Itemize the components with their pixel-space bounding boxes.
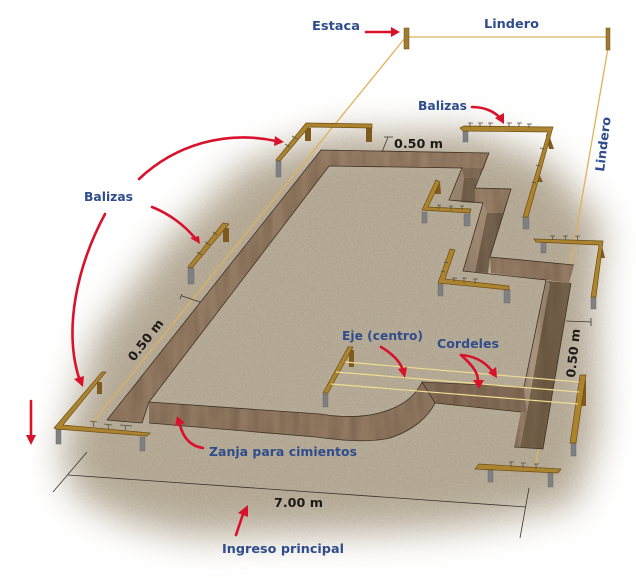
label: Zanja para cimientos: Zanja para cimientos [209, 444, 357, 459]
label: Balizas left: Balizas [84, 189, 133, 204]
trench edge lines [107, 150, 574, 449]
trench wood walls [107, 150, 574, 449]
arrow: Balizas left to bottom board [73, 214, 105, 387]
arrow: Ingreso principal [236, 505, 248, 535]
measure: 7.00 m: 7.00 m [274, 495, 323, 510]
measure: 0.50 m top: 0.50 m [394, 136, 443, 151]
arrow: down [26, 401, 36, 445]
label: Estaca: Estaca [312, 18, 360, 33]
stake batter board: inner notch upper [422, 180, 471, 226]
label: Balizas top: Balizas [418, 98, 467, 113]
stakes (estacas) [404, 28, 610, 50]
arrow: Zanja [175, 416, 203, 448]
label: Cordeles: Cordeles [437, 336, 499, 351]
foundation trench [107, 150, 574, 449]
stake batter board: right [534, 236, 605, 309]
stake batter board: left middle [188, 223, 229, 284]
arrow: Balizas top [472, 107, 504, 124]
stake batter board: top right [460, 123, 554, 229]
stake batter board: top left [276, 123, 372, 177]
arrow: Balizas left to top board [139, 136, 284, 179]
stake batter board: bottom left [54, 372, 150, 451]
label: Ingreso principal: Ingreso principal [222, 541, 344, 556]
label: Lindero top: Lindero [484, 16, 539, 31]
ground terrain [62, 132, 602, 536]
string lines (cordeles) [331, 362, 579, 404]
measure: 0.50 m left: 0.50 m [125, 316, 167, 364]
measure: 0.50 m right: 0.50 m [563, 328, 583, 378]
arrow: Balizas left to middle board [152, 207, 200, 244]
label: Eje (centro): Eje (centro) [342, 328, 423, 343]
dimension ticks: 0.50 m [180, 137, 591, 326]
arrow: Estaca [366, 27, 400, 37]
boundary lines [93, 37, 608, 464]
stake batter board: bottom right [475, 462, 561, 487]
stake batter board: inner notch lower [438, 249, 510, 303]
dimension line: 7.00 m [53, 452, 529, 538]
label: Lindero right: Lindero [592, 116, 614, 172]
arrow: Cordeles [461, 355, 497, 389]
arrow: Eje [381, 347, 407, 378]
stake batter board: lower right [570, 375, 586, 456]
stake batter board: centre left [323, 347, 354, 407]
